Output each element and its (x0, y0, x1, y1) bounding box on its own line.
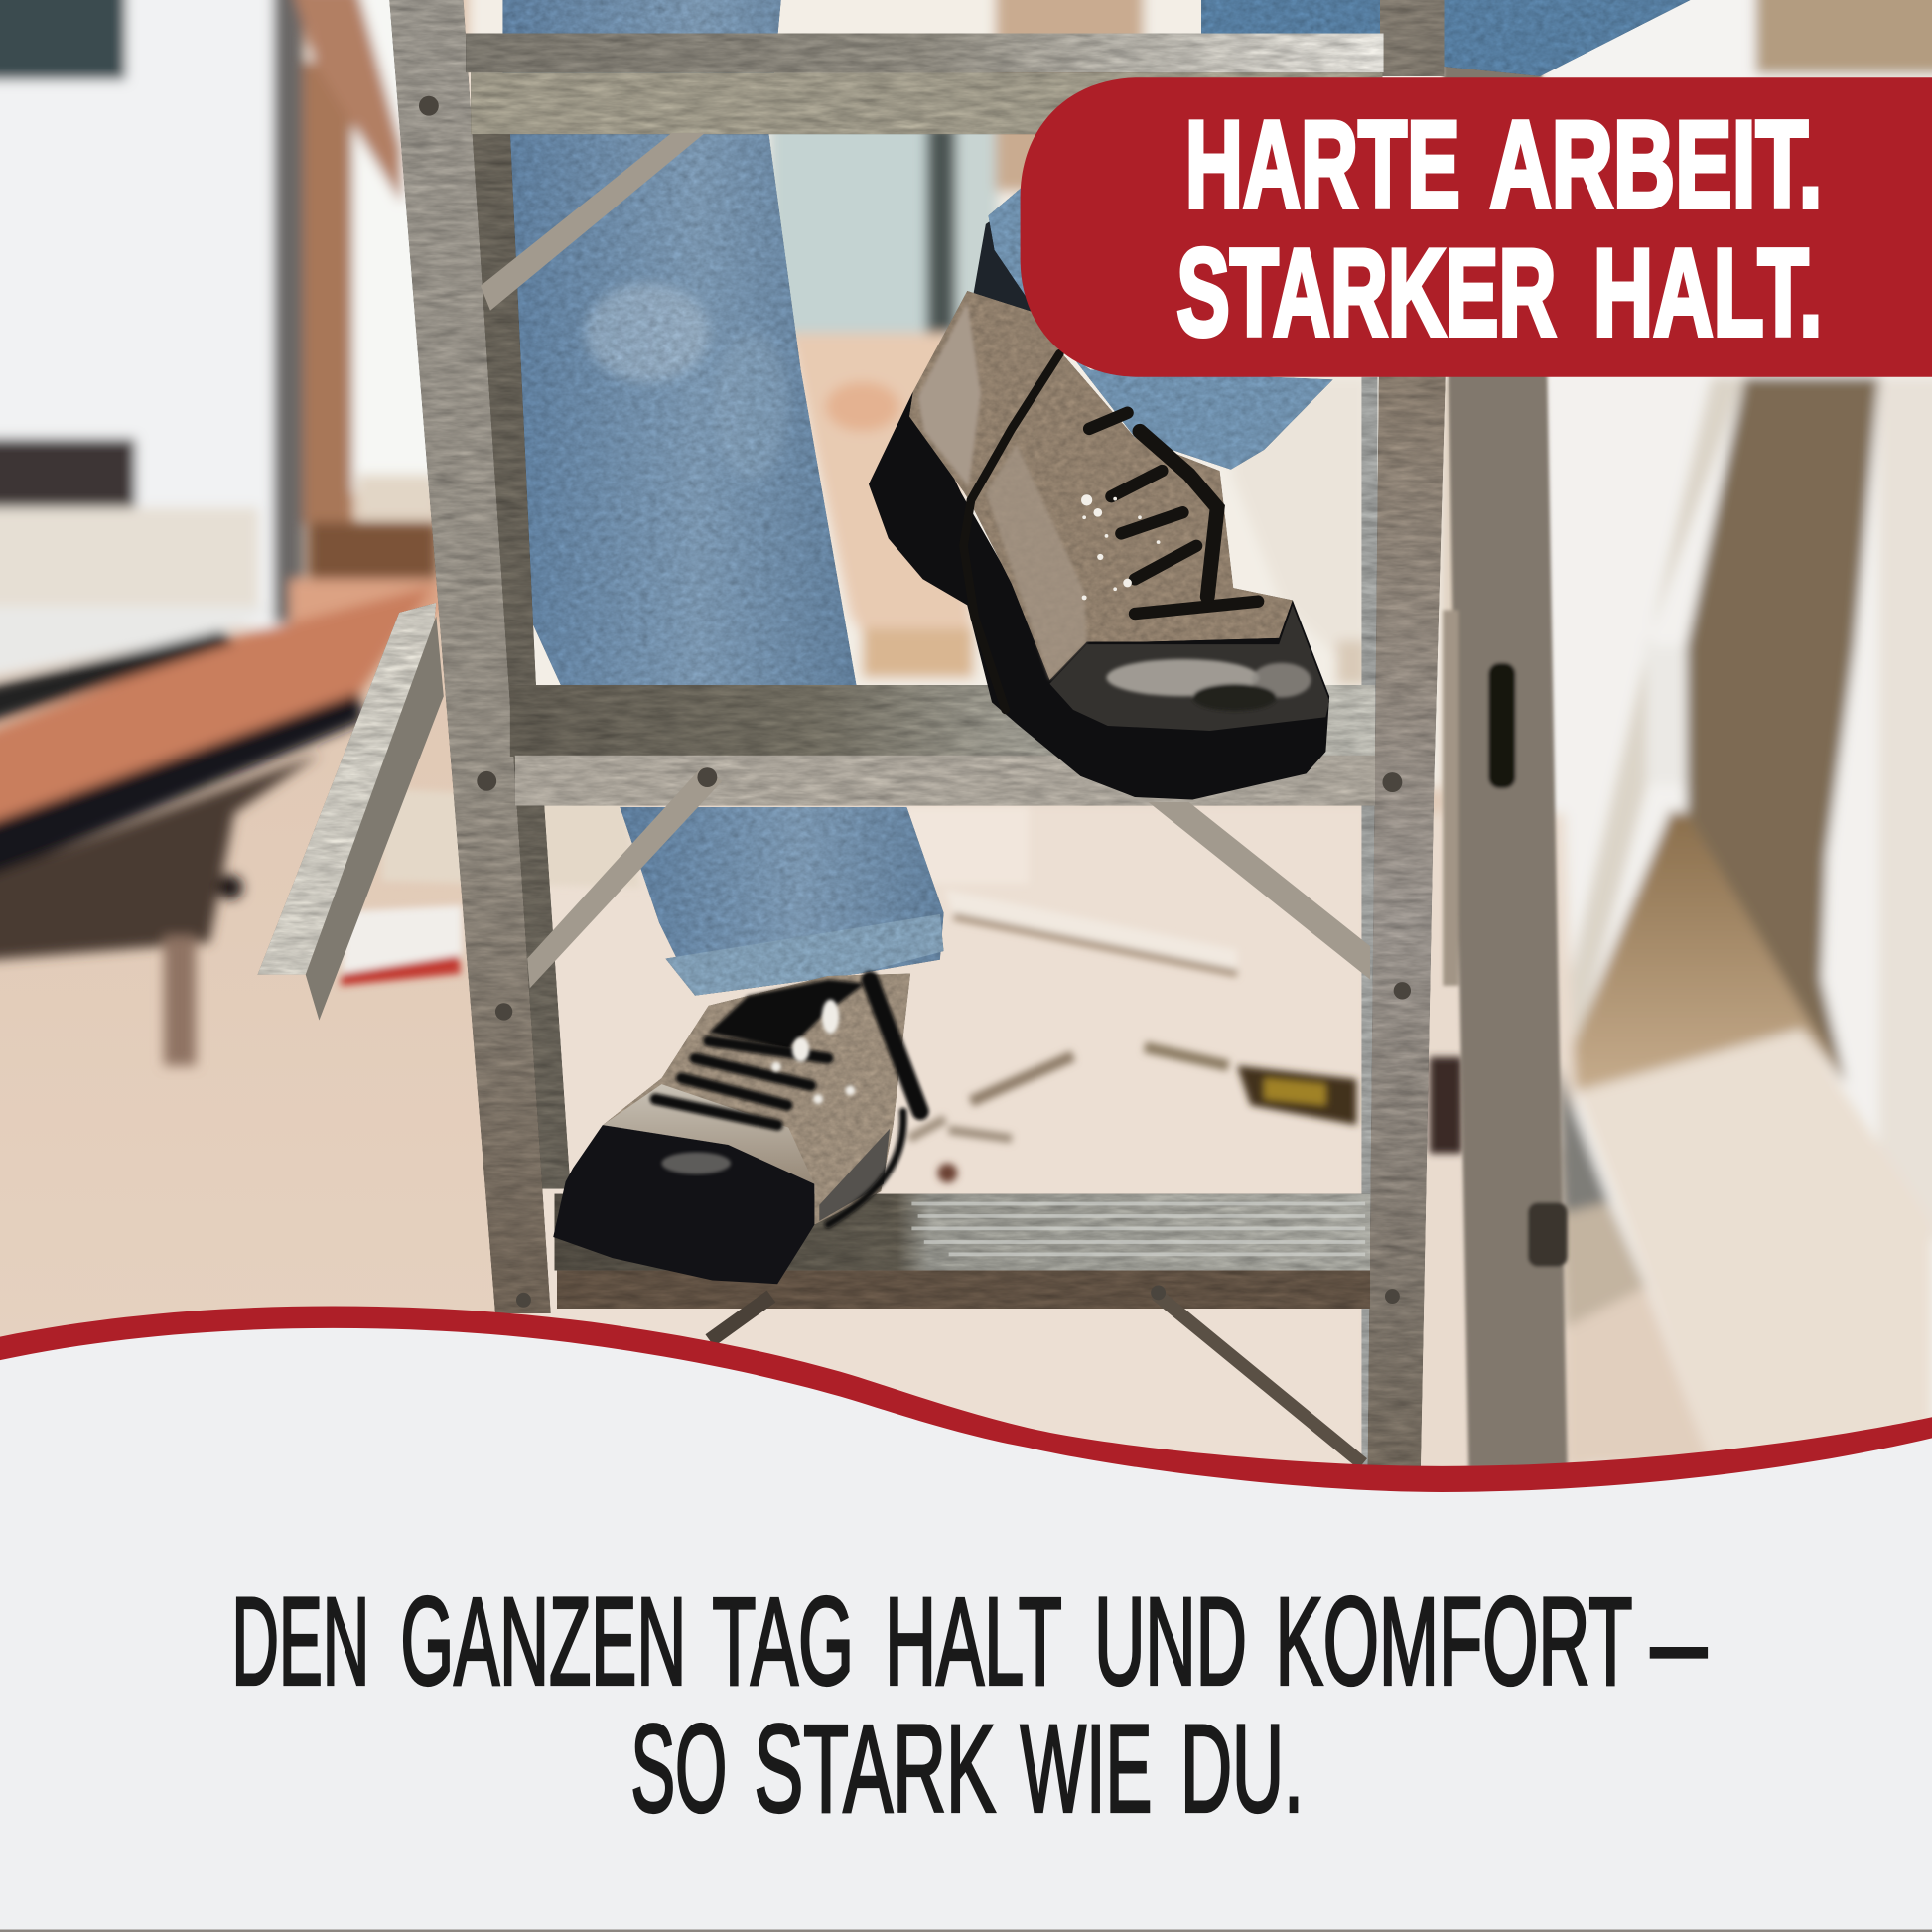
raised boot heel highlight (918, 302, 981, 486)
bottom text line 1: UND (1094, 1573, 1247, 1712)
raised boot laces (964, 353, 1258, 710)
raised jeans cuff (988, 188, 1333, 470)
light grey panel (0, 1328, 1932, 1930)
ladder left rail (389, 0, 551, 1313)
banner shape (1021, 77, 1932, 377)
bottom text line 1: DEN (231, 1573, 369, 1712)
ladder middle step (510, 685, 1375, 806)
lower boot upper (603, 973, 910, 1225)
ladder right rail (1368, 376, 1446, 1468)
photo: worker climbing a ladder (0, 0, 1932, 1491)
ladder bolts (419, 96, 1411, 1308)
lower boot (553, 973, 920, 1284)
lower boot laces (655, 980, 920, 1225)
bottom text line 1: TAG (712, 1573, 854, 1712)
headline line 2: STARKER (1176, 225, 1556, 362)
ladder side flap (257, 603, 444, 1021)
ladder lower step (554, 1194, 1370, 1309)
far ladder post (1442, 0, 1568, 1468)
bottom edge strip (0, 1930, 1932, 1932)
lower riser (557, 1271, 1370, 1309)
raised boot (869, 188, 1333, 799)
lower boot paint spots (771, 1000, 855, 1104)
raised boot toe cap (1049, 605, 1329, 731)
ladder top right rail (1380, 0, 1445, 76)
bottom text line 1: GANZEN (400, 1573, 686, 1712)
bottom text line 2: STARK (755, 1699, 996, 1838)
raised boot side panel (986, 444, 1087, 680)
raised boot paint splatter (1081, 494, 1160, 600)
ladder braces (481, 133, 1370, 1463)
bottom text line 1: – (1651, 1573, 1707, 1712)
jeans: back leg (502, 0, 944, 996)
raised boot sock (971, 198, 1033, 312)
lower boot dust (661, 1152, 731, 1174)
bottom text line 2: WIE (1021, 1699, 1152, 1838)
lower boot lace cluster (709, 980, 865, 1049)
ladder top step (466, 34, 1384, 134)
lower boot light toe (603, 1084, 814, 1184)
raised boot sole (869, 392, 1329, 799)
red wave band (0, 1307, 1932, 1601)
lower tread highlights (911, 1204, 1365, 1254)
bottom text line 1: KOMFORT (1276, 1573, 1632, 1712)
ladder back rail (472, 129, 1378, 1466)
headline line 1: HARTE (1185, 96, 1460, 233)
headline line 2: HALT. (1593, 225, 1823, 362)
floor debris (341, 788, 1462, 1182)
raised boot dust (1106, 659, 1311, 711)
jeans: raised leg top (1201, 0, 1691, 76)
lower boot side panel (819, 1129, 890, 1221)
lower boot toe and sole (553, 1125, 814, 1284)
red headline banner (1021, 77, 1932, 377)
bottom panel with red wave (0, 1307, 1932, 1932)
background: blurred construction room (0, 0, 1932, 1491)
bottom text line 1: HALT (885, 1573, 1062, 1712)
lower tread (554, 1194, 1370, 1271)
bottom text line 2: SO (630, 1699, 727, 1838)
bottom text line 2: DU. (1180, 1699, 1304, 1838)
raised boot upper (909, 291, 1293, 680)
